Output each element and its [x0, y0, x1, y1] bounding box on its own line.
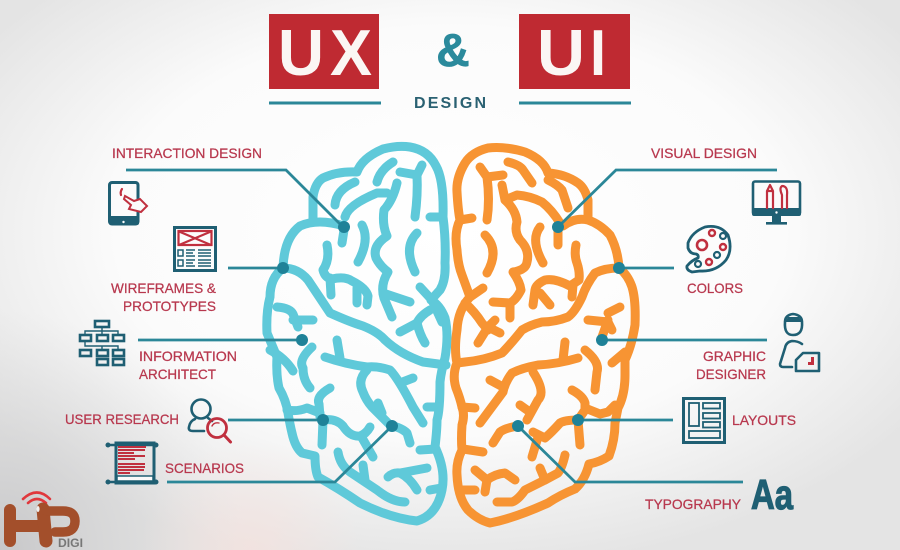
connector: colors — [613, 262, 674, 274]
connector: information architect — [138, 334, 308, 346]
label: wireframes and prototypes: WIREFRAMES & — [111, 280, 217, 296]
icon: graphic designer — [780, 314, 819, 371]
connector: wireframes — [228, 262, 289, 274]
title: UX box: U — [278, 16, 324, 89]
logo: HP Digi: DIGI — [58, 536, 83, 550]
label: wireframes and prototypes — [111, 280, 217, 314]
connector: graphic designer — [596, 334, 767, 346]
label: graphic designer — [696, 348, 766, 382]
title: UX box: X — [330, 16, 372, 89]
label: colors: COLORS — [687, 280, 743, 296]
label: interaction design: INTERACTION DESIGN — [112, 145, 262, 161]
label: user research: USER RESEARCH — [65, 411, 179, 427]
connector: user research — [228, 414, 329, 426]
title: UI box — [519, 14, 630, 89]
connector: typography — [512, 420, 743, 482]
label: information architect: ARCHITECT — [139, 366, 216, 382]
icon: typography Aa: Aa — [751, 471, 793, 518]
connector: interaction design — [126, 170, 350, 233]
title underline left — [269, 102, 381, 104]
icon: wireframe page — [174, 228, 216, 270]
connector: layouts — [572, 414, 673, 426]
icon: tablet with hand — [109, 182, 147, 225]
label: graphic designer: GRAPHIC — [703, 348, 766, 364]
label: layouts: LAYOUTS — [732, 412, 796, 428]
title: UX box — [269, 14, 379, 89]
label: information architect: INFORMATION — [139, 348, 237, 364]
title underline right — [519, 102, 631, 104]
title: UI box: I — [590, 16, 606, 89]
label: wireframes and prototypes: PROTOTYPES — [123, 298, 216, 314]
connector: visual design — [552, 170, 777, 233]
icon: scroll document — [106, 442, 158, 484]
label: information architect — [139, 348, 237, 382]
label: visual design: VISUAL DESIGN — [651, 145, 757, 161]
subtitle: design: DESIGN — [414, 95, 486, 112]
icon: paint palette — [687, 226, 730, 272]
icon: user with magnifier — [189, 400, 230, 442]
title: UI box: U — [537, 16, 585, 89]
icon: hierarchy diagram — [80, 321, 124, 365]
brain: left cyan hemisphere — [267, 146, 447, 521]
label: scenarios: SCENARIOS — [165, 460, 244, 476]
logo: HP Digi — [10, 492, 83, 550]
label: typography: TYPOGRAPHY — [645, 496, 742, 512]
label: graphic designer: DESIGNER — [696, 366, 766, 382]
connector: scenarios — [167, 420, 398, 482]
icon: layout grid — [684, 398, 724, 442]
title: ampersand: & — [436, 24, 470, 76]
brain: right orange hemisphere — [454, 148, 635, 523]
icon: monitor with pencil and brush — [752, 182, 801, 225]
